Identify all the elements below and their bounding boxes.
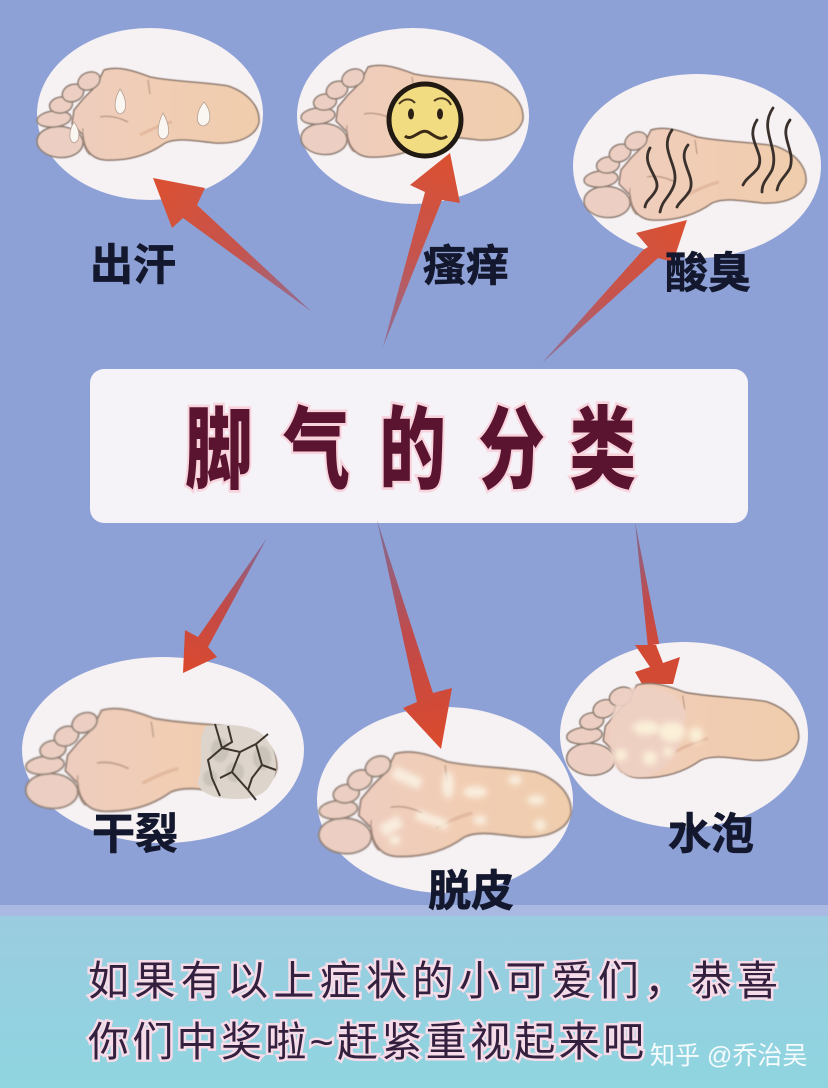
arrow: to itching (383, 153, 460, 347)
watermark: 知乎 @乔治吴 (650, 1042, 807, 1070)
label: sweating: 出汗 (90, 242, 176, 290)
bottom banner background (0, 905, 828, 1088)
panel: peeling foot (317, 707, 573, 893)
title: 分 (478, 399, 545, 500)
label: itching: 瘙痒 (423, 243, 509, 291)
panel: itchy foot (297, 28, 529, 204)
title panel (90, 369, 748, 523)
icon: itchy face (389, 84, 461, 156)
label: cracks: 干裂 (92, 811, 178, 859)
panel: sweating foot (36, 28, 263, 200)
panel: odor foot (573, 74, 821, 258)
label: peeling: 脱皮 (428, 868, 514, 916)
title: 脚 (185, 399, 252, 500)
panel: cracked foot (22, 657, 304, 843)
label: blisters: 水泡 (668, 811, 754, 859)
icon: cracked heel (198, 724, 276, 800)
arrow: to blisters (635, 522, 680, 684)
title: 气 (283, 399, 350, 500)
closing message: 你们中奖啦~赶紧重视起来吧 (88, 1019, 644, 1065)
icon: odor waves (645, 108, 791, 212)
title: 类 (569, 399, 636, 500)
icon: blisters (610, 687, 703, 777)
icon: sweat drops (70, 89, 210, 143)
label: odor: 酸臭 (665, 250, 751, 298)
arrow: to sweating (153, 178, 312, 312)
closing message (88, 958, 778, 1065)
icon: peeling patches (378, 766, 546, 845)
arrow: to dry cracks (183, 538, 267, 673)
title: 的 (379, 399, 446, 500)
arrow: to peeling (377, 520, 452, 749)
panel: blister foot (560, 642, 808, 828)
closing message: 如果有以上症状的小可爱们，恭喜 (88, 958, 778, 1004)
arrow: to odor (542, 220, 687, 363)
